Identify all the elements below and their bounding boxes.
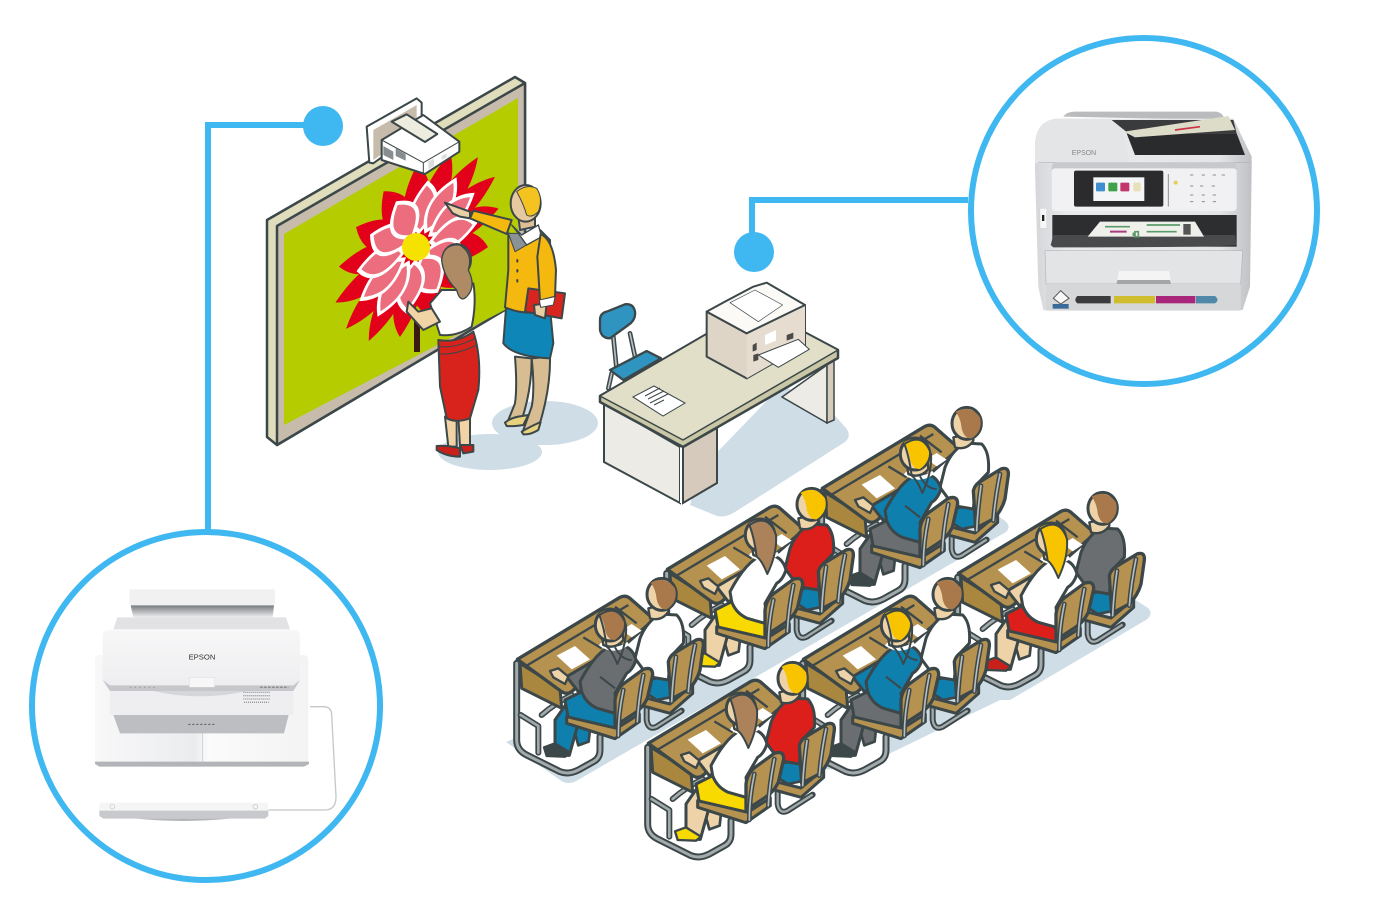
floor shadow: student row one: [506, 500, 1009, 783]
EPSON logo on printer: EPSON: [1072, 150, 1096, 157]
teacher pointing at the board: [445, 185, 565, 434]
EPSON logo on projector: EPSON: [189, 653, 215, 662]
short-throw projector on wall mount: [367, 98, 459, 174]
paper on teacher desk: [633, 386, 685, 416]
desktop printer on teacher desk: [707, 283, 809, 378]
teacher desk floor shadow: [690, 385, 849, 516]
desk unit: back row middle: [667, 488, 853, 683]
floor shadow: student row two: [815, 590, 1151, 770]
product photo: Epson office printer: [1035, 112, 1252, 311]
interactive whiteboard: [267, 77, 525, 445]
connector line: printer: [752, 200, 968, 252]
teacher chair: [600, 304, 661, 388]
connector line: projector: [208, 125, 323, 532]
desk unit: front row left: [648, 662, 834, 857]
flower image on the board: [334, 117, 500, 378]
callout circle: printer: [971, 38, 1317, 384]
desk unit: front row right: [958, 492, 1144, 687]
desk unit: front row middle: [803, 578, 989, 773]
connector dot: projector: [303, 106, 343, 146]
desk unit: back row left: [517, 578, 703, 773]
teacher desk: [600, 306, 838, 503]
callout circle: projector: [32, 532, 380, 880]
desk unit: back row right: [822, 407, 1008, 602]
connector dot: printer: [734, 232, 774, 272]
floor shadows: people at the board: [438, 401, 598, 470]
product photo: Epson interactive projector and touch sensor: [95, 589, 336, 821]
student touching the board: [407, 244, 479, 457]
